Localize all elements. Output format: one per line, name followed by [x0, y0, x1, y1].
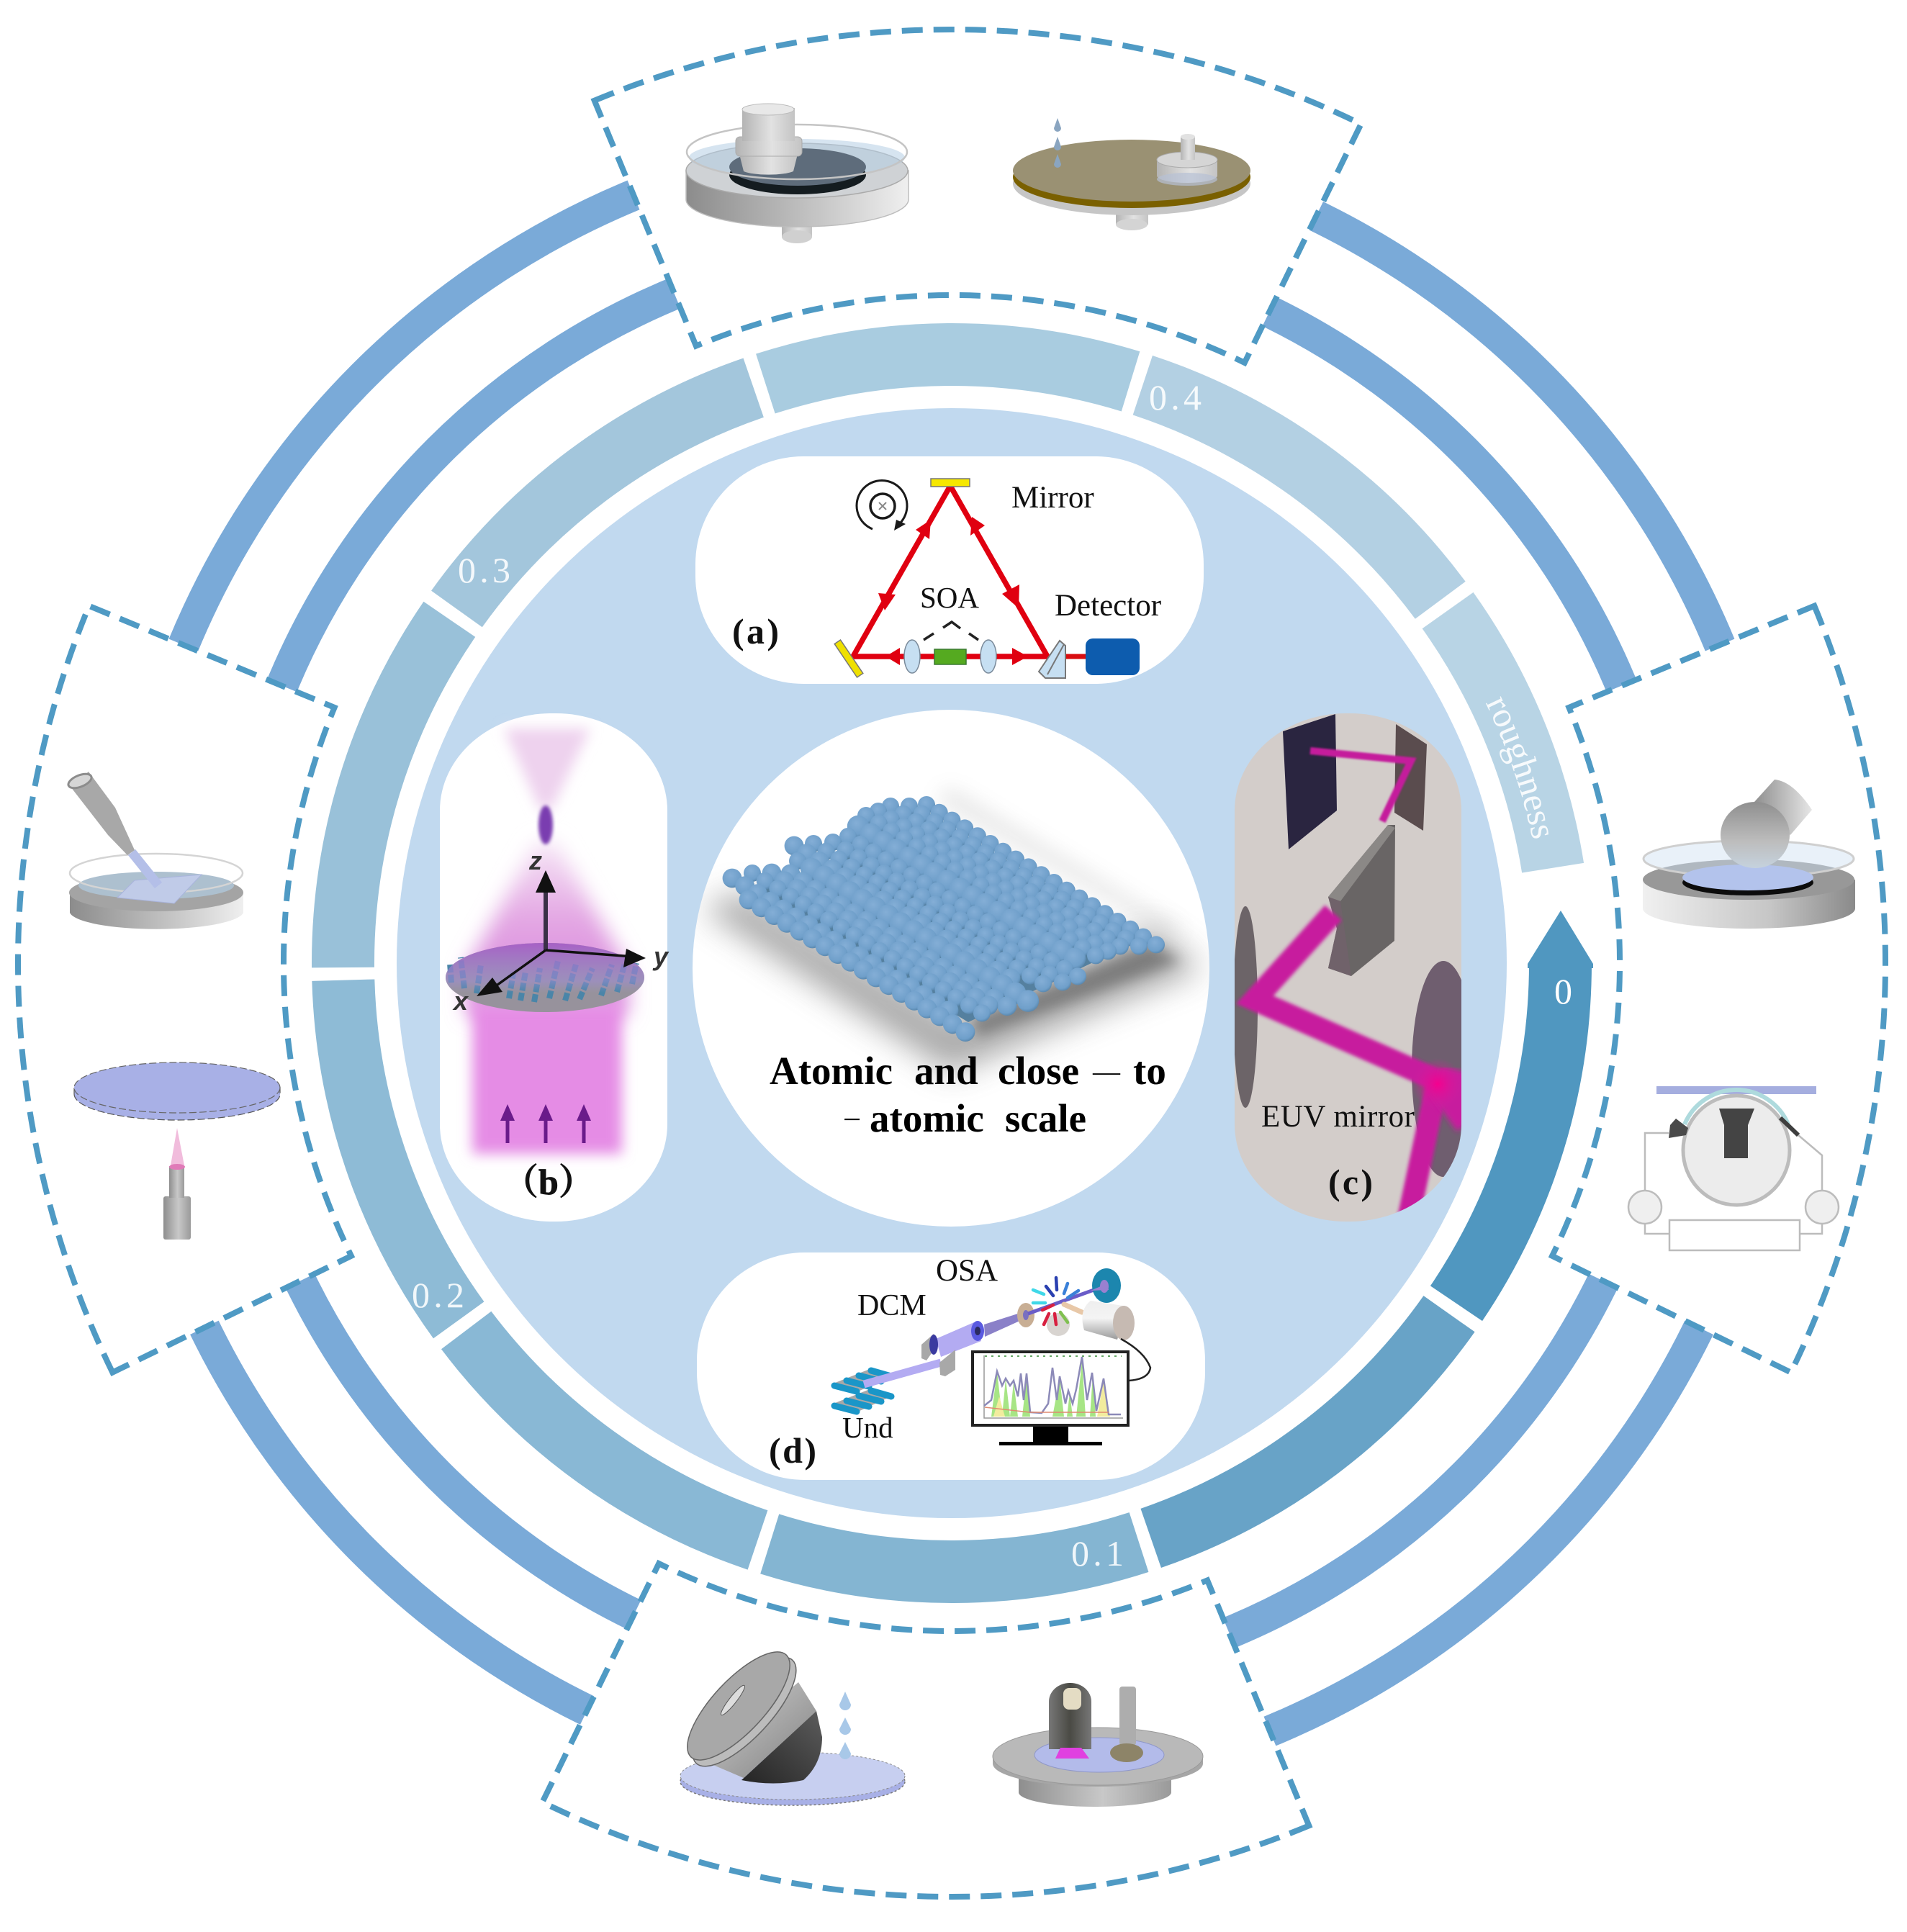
panel b: metasurface with pink beam — [440, 713, 670, 1222]
labels: SOA — [920, 581, 979, 614]
labels: (d) — [769, 1430, 816, 1471]
label: roughness: roughness — [1486, 696, 1548, 839]
labels — [769, 1254, 998, 1471]
axes — [452, 846, 670, 1016]
labels: Und — [842, 1411, 893, 1444]
atomic lattice sheet — [723, 796, 1165, 1042]
labels: (c) — [1328, 1162, 1373, 1202]
arrow: head of roughness scale — [1528, 911, 1593, 968]
labels — [1261, 1100, 1415, 1202]
monitor with spectrum chart — [973, 1352, 1128, 1445]
heading: atomic and close-to-atomic scale: scale — [1005, 1096, 1086, 1140]
heading: atomic and close-to-atomic scale: — — [1092, 1057, 1121, 1087]
panel d: undulator beamline — [697, 1252, 1205, 1480]
lattice shadow — [702, 788, 1202, 1073]
mirrors and magenta beam — [1233, 906, 1475, 1216]
label: 0: 0 — [1554, 971, 1572, 1011]
heading: atomic and close-to-atomic scale: close — [998, 1049, 1079, 1093]
undulators — [831, 1369, 894, 1412]
icon: nozzle jet over slide in bath — [66, 771, 243, 929]
icon: wafer over pink plasma torch — [74, 1062, 280, 1240]
icon: rotation symbol — [857, 481, 907, 531]
axes: x — [452, 986, 469, 1016]
heading: atomic and close-to-atomic scale: Atomic — [770, 1049, 893, 1093]
label: 0.3: 0.3 — [458, 550, 510, 590]
panel c: EUV mirror system — [1233, 713, 1475, 1222]
panel: central atomic lattice — [693, 710, 1209, 1227]
heading: atomic and close-to-atomic scale: − — [843, 1101, 861, 1137]
outer blue ring arcs — [120, 132, 1783, 1795]
panel: left process sector — [18, 606, 351, 1373]
heading: atomic and close-to-atomic scale — [770, 1049, 1166, 1140]
heading: atomic and close-to-atomic scale: atomic — [870, 1096, 984, 1140]
detector cylinder — [1082, 1301, 1150, 1381]
label: 0.4: 0.4 — [1149, 377, 1202, 417]
icon: plasma jet tube and rod on wafer stage — [993, 1683, 1203, 1807]
scale labels — [412, 377, 1572, 1574]
beam and optics — [864, 1268, 1121, 1384]
labels: OSA — [936, 1254, 998, 1288]
axes: y — [652, 942, 670, 971]
label: 0.1: 0.1 — [1071, 1533, 1124, 1574]
labels: (a) — [732, 611, 779, 651]
icon: circular tool on wafer with circuit — [1628, 1086, 1839, 1250]
labels — [732, 481, 1161, 651]
icon: tilted bonnet tool on wafer with droplets — [672, 1638, 905, 1805]
panel a: ring laser with SOA — [695, 456, 1204, 684]
icon: polishing tool in bath — [686, 104, 909, 243]
panel: bottom process sector — [542, 1563, 1309, 1897]
sample and scattered particles — [1033, 1278, 1082, 1336]
labels: DCM — [857, 1289, 927, 1322]
icon: brown polishing disc with small tool and droplets — [1013, 118, 1250, 230]
panel: top process sector — [595, 30, 1361, 363]
labels: Detector — [1055, 589, 1161, 623]
labels: EUV mirror — [1261, 1100, 1415, 1134]
panel: right process sector — [1552, 606, 1885, 1373]
metasurface disc with pillars — [446, 943, 644, 1012]
label: 0.2: 0.2 — [412, 1275, 464, 1315]
pink light cones — [466, 728, 628, 1154]
axes: z — [528, 846, 542, 875]
light blue central disc — [397, 408, 1507, 1518]
heading: atomic and close-to-atomic scale: and — [914, 1049, 978, 1093]
heading: atomic and close-to-atomic scale: to — [1133, 1049, 1166, 1093]
icon: ball polishing tool in bath — [1643, 780, 1855, 929]
diagram: red optical triangle — [834, 479, 1140, 678]
screens — [1283, 714, 1427, 849]
arrows: incident light — [500, 1104, 591, 1143]
chart: roughness ring segments — [102, 113, 1802, 1813]
grazing mirror block — [1328, 825, 1395, 976]
label (b): （b） — [502, 1162, 595, 1202]
labels: Mirror — [1011, 481, 1094, 515]
